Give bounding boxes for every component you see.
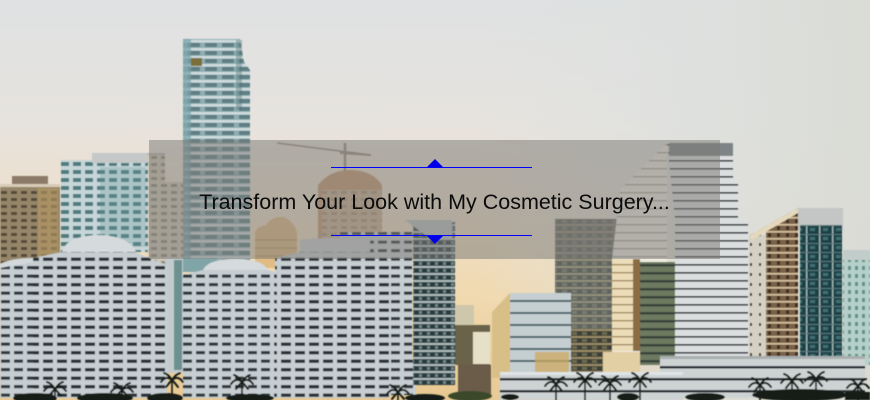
- residential tower right: [749, 208, 843, 357]
- top divider with up triangle: [331, 159, 532, 168]
- crane: [277, 143, 371, 172]
- front white block 3: [275, 238, 390, 398]
- small mid buildings: [455, 305, 491, 395]
- front white block 1: [33, 235, 167, 398]
- left tan building: [0, 176, 60, 265]
- pale building behind front block: [340, 232, 416, 395]
- title: Transform Your Look with My Cosmetic Surgery...: [199, 190, 670, 214]
- bottom divider with down triangle: [331, 235, 532, 244]
- teal apartment building: [61, 153, 148, 252]
- panel: translucent title band: [149, 140, 720, 259]
- low podium right: [660, 356, 865, 398]
- low white building center: [500, 372, 683, 400]
- narrow light building: [165, 258, 217, 373]
- far right teal tower: [843, 250, 870, 365]
- office block with tan side: [492, 293, 571, 378]
- dark glass tower: [405, 220, 455, 385]
- palm trees and foliage: [13, 372, 870, 400]
- tall tower: [183, 39, 250, 262]
- grey tower: [555, 219, 617, 374]
- large striped skyscraper: [603, 143, 748, 373]
- front white block far left: [0, 258, 33, 398]
- tan round tower behind: [318, 170, 382, 240]
- front white block 2: [183, 259, 275, 398]
- tan domed building: [255, 217, 297, 268]
- beige building behind: [92, 153, 183, 267]
